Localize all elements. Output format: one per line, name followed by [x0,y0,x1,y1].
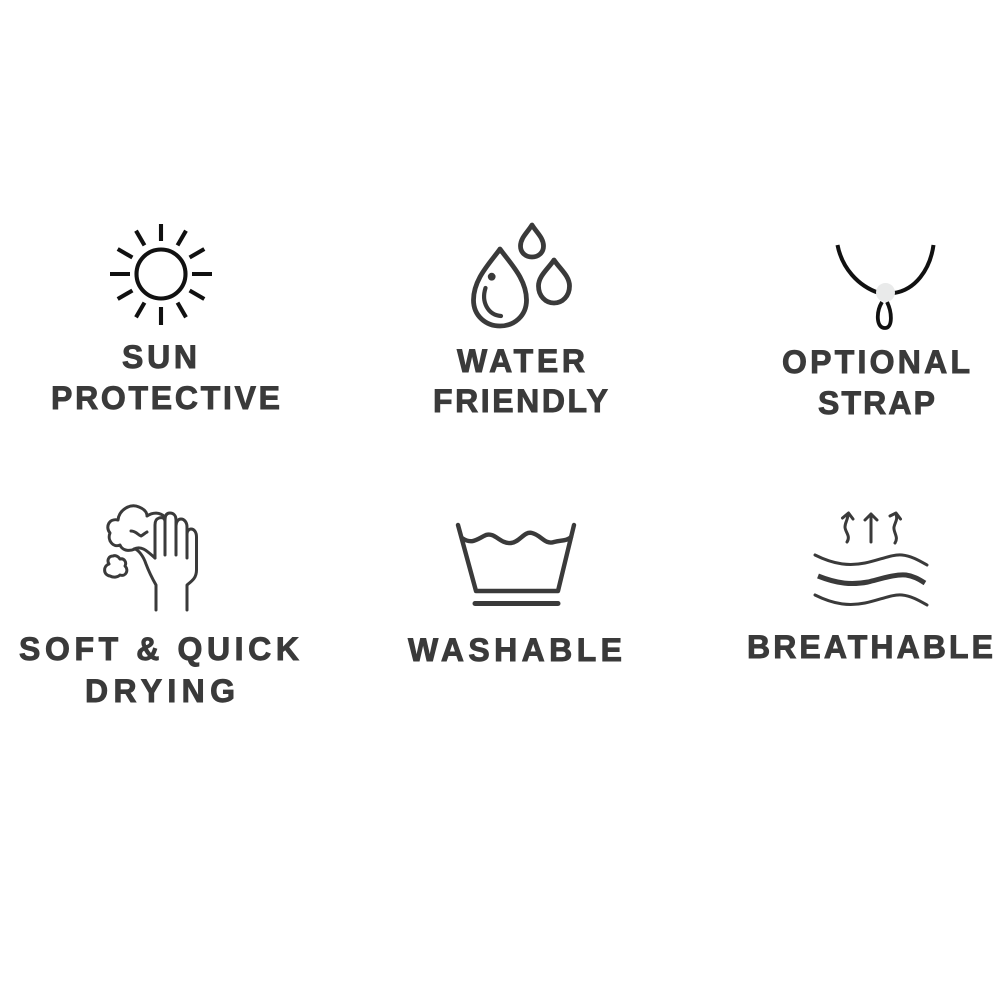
heading: soft and quick drying: DRYING [85,673,235,709]
heading: water friendly [433,343,608,419]
heading: sun protective: PROTECTIVE [51,380,280,416]
icon: hand with cloud [105,506,196,610]
panel: optional strap [782,245,970,421]
heading: sun protective: SUN [122,339,197,375]
heading: optional strap [782,344,970,421]
panel: water friendly [433,225,608,419]
heading: soft and quick drying: SOFT & QUICK [19,631,299,667]
icon: heat waves and arrows [815,513,927,605]
panel: washable [408,525,622,668]
icon: wash basin [458,525,574,604]
heading: washable: WASHABLE [408,632,622,668]
panel: sun protective [51,224,280,416]
icon: water drops [474,225,570,326]
panel: breathable [747,513,993,665]
heading: water friendly: FRIENDLY [433,383,608,419]
heading: sun protective [51,339,280,416]
heading: optional strap: OPTIONAL [782,344,970,380]
heading: optional strap: STRAP [818,385,935,421]
icon: sun [110,224,212,325]
heading: soft and quick drying [19,631,299,709]
heading: breathable: BREATHABLE [747,629,993,665]
heading: water friendly: WATER [457,343,585,379]
icon: strap with bead [838,245,934,328]
panel: soft and quick drying [19,506,299,709]
